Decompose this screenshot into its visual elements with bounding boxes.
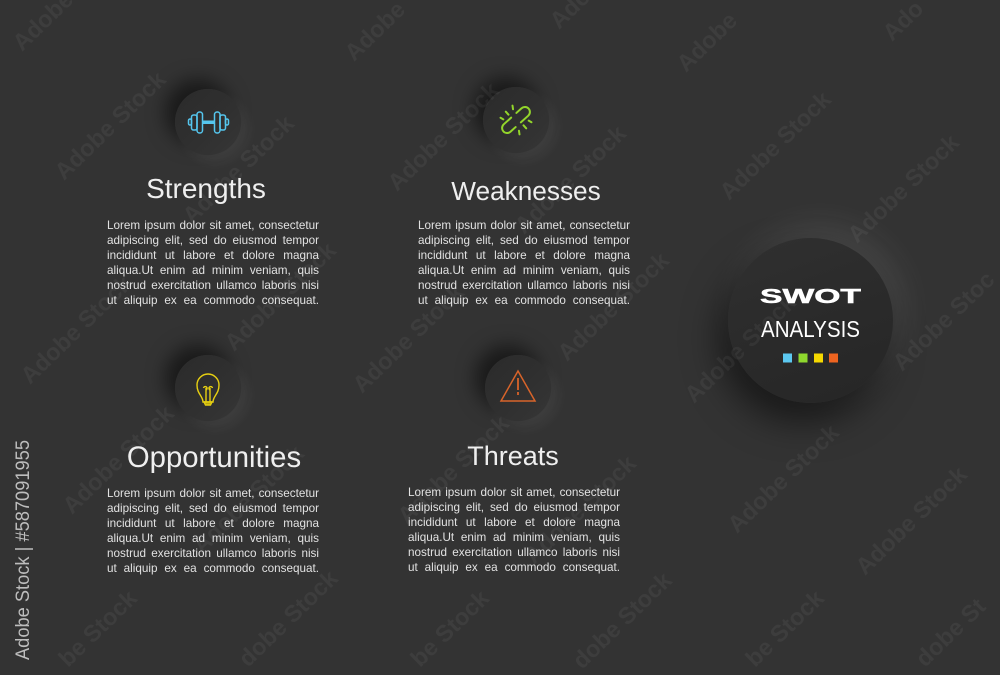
watermark overlay: Adobe Stock	[392, 409, 514, 529]
icon disc: threats warning triangle	[485, 355, 551, 421]
text block: weaknesses	[418, 219, 630, 307]
watermark overlay: be Stock	[405, 584, 495, 672]
watermark overlay: Adobe Stock	[15, 269, 137, 389]
watermark overlay: dobe Stock	[567, 566, 677, 674]
subtitle: ANALYSIS: ANALYSIS	[761, 316, 860, 342]
text block: threats	[408, 486, 620, 574]
watermark overlay: Adobe Stock	[722, 418, 844, 538]
watermark overlay: Adobe Stoc	[887, 266, 999, 376]
text block: threats: nostrud exercitation ullamco laboris nisi	[408, 546, 620, 559]
watermark overlay: Adobe Stock	[382, 76, 504, 196]
text block: strengths: incididunt ut labore et dolore magna	[107, 249, 319, 262]
text block: opportunities: adipiscing elit, sed do eiusmod tempor	[107, 502, 319, 515]
watermark overlay: Adobe Stock	[509, 119, 631, 239]
heading: Opportunities: Opportunities	[127, 441, 301, 474]
text block: strengths: aliqua.Ut enim ad minim veniam, quis	[107, 264, 319, 277]
watermark overlay: be Stock	[740, 584, 830, 672]
text block: strengths	[107, 219, 319, 307]
text block: strengths: ut aliquip ex ea commodo consequat.	[107, 294, 319, 307]
watermark overlay: dobe St	[910, 593, 991, 672]
text block: opportunities	[107, 487, 319, 575]
text block: threats: aliqua.Ut enim ad minim veniam, quis	[408, 531, 620, 544]
watermark overlay: Adobe Stock	[177, 109, 299, 229]
watermark overlay: Adobe Stock	[714, 85, 836, 205]
text block: threats: Lorem ipsum dolor sit amet, consectetur	[408, 486, 620, 499]
watermark overlay: Adobe Stock	[842, 128, 964, 248]
text block: opportunities: Lorem ipsum dolor sit amet, consectetur	[107, 487, 319, 500]
text block: weaknesses: incididunt ut labore et dolore magna	[418, 249, 630, 262]
heading: Strengths: Strengths	[146, 173, 266, 204]
icon disc: opportunities light bulb	[175, 355, 241, 421]
panel: SWOT analysis badge	[728, 238, 893, 403]
watermark overlay: Adobe Stock	[49, 65, 171, 185]
watermark overlay: Adobe Stock	[552, 246, 674, 366]
text block: strengths: nostrud exercitation ullamco laboris nisi	[107, 279, 319, 292]
text block: threats: incididunt ut labore et dolore magna	[408, 516, 620, 529]
watermark overlay: Adobe Stock	[519, 449, 641, 569]
watermark overlay: Adobe Stock	[219, 236, 341, 356]
watermark overlay: Adobe	[671, 7, 742, 77]
watermark overlay: be Stock	[53, 584, 143, 672]
watermark overlay: Adobe Stock	[850, 460, 972, 580]
text block: opportunities: ut aliquip ex ea commodo consequat.	[107, 562, 319, 575]
text block: threats: adipiscing elit, sed do eiusmod tempor	[408, 501, 620, 514]
text block: strengths: adipiscing elit, sed do eiusmod tempor	[107, 234, 319, 247]
heading: Threats: Threats	[467, 441, 559, 471]
watermark overlay: Adobe Stock	[679, 288, 801, 408]
text block: opportunities: nostrud exercitation ullamco laboris nisi	[107, 547, 319, 560]
watermark overlay: Adobe Stock	[347, 278, 469, 398]
text block: weaknesses: ut aliquip ex ea commodo consequat.	[418, 294, 630, 307]
text block: weaknesses: Lorem ipsum dolor sit amet, consectetur	[418, 219, 630, 232]
heading: Weaknesses: Weaknesses	[451, 176, 601, 206]
watermark overlay: Adobe Stock	[57, 399, 179, 519]
text block: opportunities: incididunt ut labore et dolore magna	[107, 517, 319, 530]
text block: weaknesses: nostrud exercitation ullamco laboris nisi	[418, 279, 630, 292]
title: SWOT: SWOT	[760, 286, 861, 308]
side label: stock id: Adobe Stock | #587091955	[13, 440, 34, 660]
text block: weaknesses: aliqua.Ut enim ad minim veniam, quis	[418, 264, 630, 277]
icon disc: weaknesses broken link	[483, 87, 549, 153]
text block: strengths: Lorem ipsum dolor sit amet, consectetur	[107, 219, 319, 232]
watermark overlay: dobe Stock	[233, 564, 343, 672]
colour squares	[783, 354, 838, 362]
text block: opportunities: aliqua.Ut enim ad minim veniam, quis	[107, 532, 319, 545]
text block: weaknesses: adipiscing elit, sed do eiusmod tempor	[418, 234, 630, 247]
watermark overlay: Adobe Stock	[187, 439, 309, 559]
text block: threats: ut aliquip ex ea commodo consequat.	[408, 561, 620, 574]
icon disc: strengths dumbbell	[175, 89, 241, 155]
